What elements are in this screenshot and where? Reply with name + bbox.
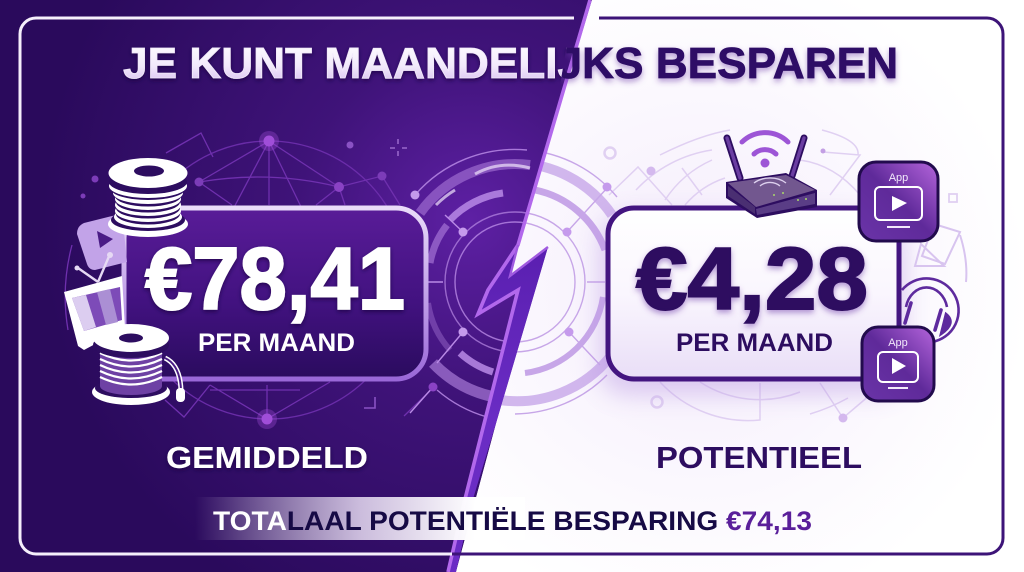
per maand: PER MAAND xyxy=(198,329,355,357)
central ring graphic xyxy=(410,149,617,417)
icon: headphones xyxy=(902,278,959,342)
background: white right half xyxy=(456,0,1024,572)
icon: app tile bottom: App xyxy=(888,337,908,349)
amount: €78,41 xyxy=(145,229,405,328)
icon: app tile top xyxy=(859,162,938,241)
panel: gemiddeld card xyxy=(124,208,426,379)
per maand: PER MAAND xyxy=(676,329,833,357)
label: potentieel: POTENTIEEL xyxy=(656,440,862,475)
panel: potentieel card xyxy=(608,208,899,379)
icon: bottom cable spool xyxy=(92,324,185,405)
rings on left half xyxy=(410,148,531,417)
rings on right half xyxy=(502,152,618,415)
icon: phone and paper xyxy=(915,224,966,282)
card background xyxy=(608,208,899,379)
card background xyxy=(124,208,426,379)
total savings banner xyxy=(195,497,812,540)
icon: retro tv xyxy=(64,252,125,350)
lightning bolt and divider xyxy=(448,0,590,572)
total savings banner: TOTALAAL POTENTIËLE BESPARING €74,13 xyxy=(213,506,812,536)
title: JE KUNT MAANDELIJKS BESPAREN xyxy=(123,39,898,88)
icon: app tile bottom xyxy=(862,327,934,401)
left network globe xyxy=(65,131,433,429)
icon: video play badge xyxy=(77,216,127,270)
icon: router with wifi xyxy=(726,133,817,218)
amount: €4,28 xyxy=(636,229,868,328)
label: gemiddeld: GEMIDDELD xyxy=(166,440,368,475)
icon: top cable spool xyxy=(108,158,188,237)
title: JE KUNT MAANDELIJKS BESPAREN xyxy=(123,39,898,88)
background: dark left half xyxy=(0,0,592,572)
icon: app tile top: App xyxy=(889,172,908,184)
right network lines xyxy=(604,130,957,422)
glow behind potentieel card xyxy=(600,215,905,395)
